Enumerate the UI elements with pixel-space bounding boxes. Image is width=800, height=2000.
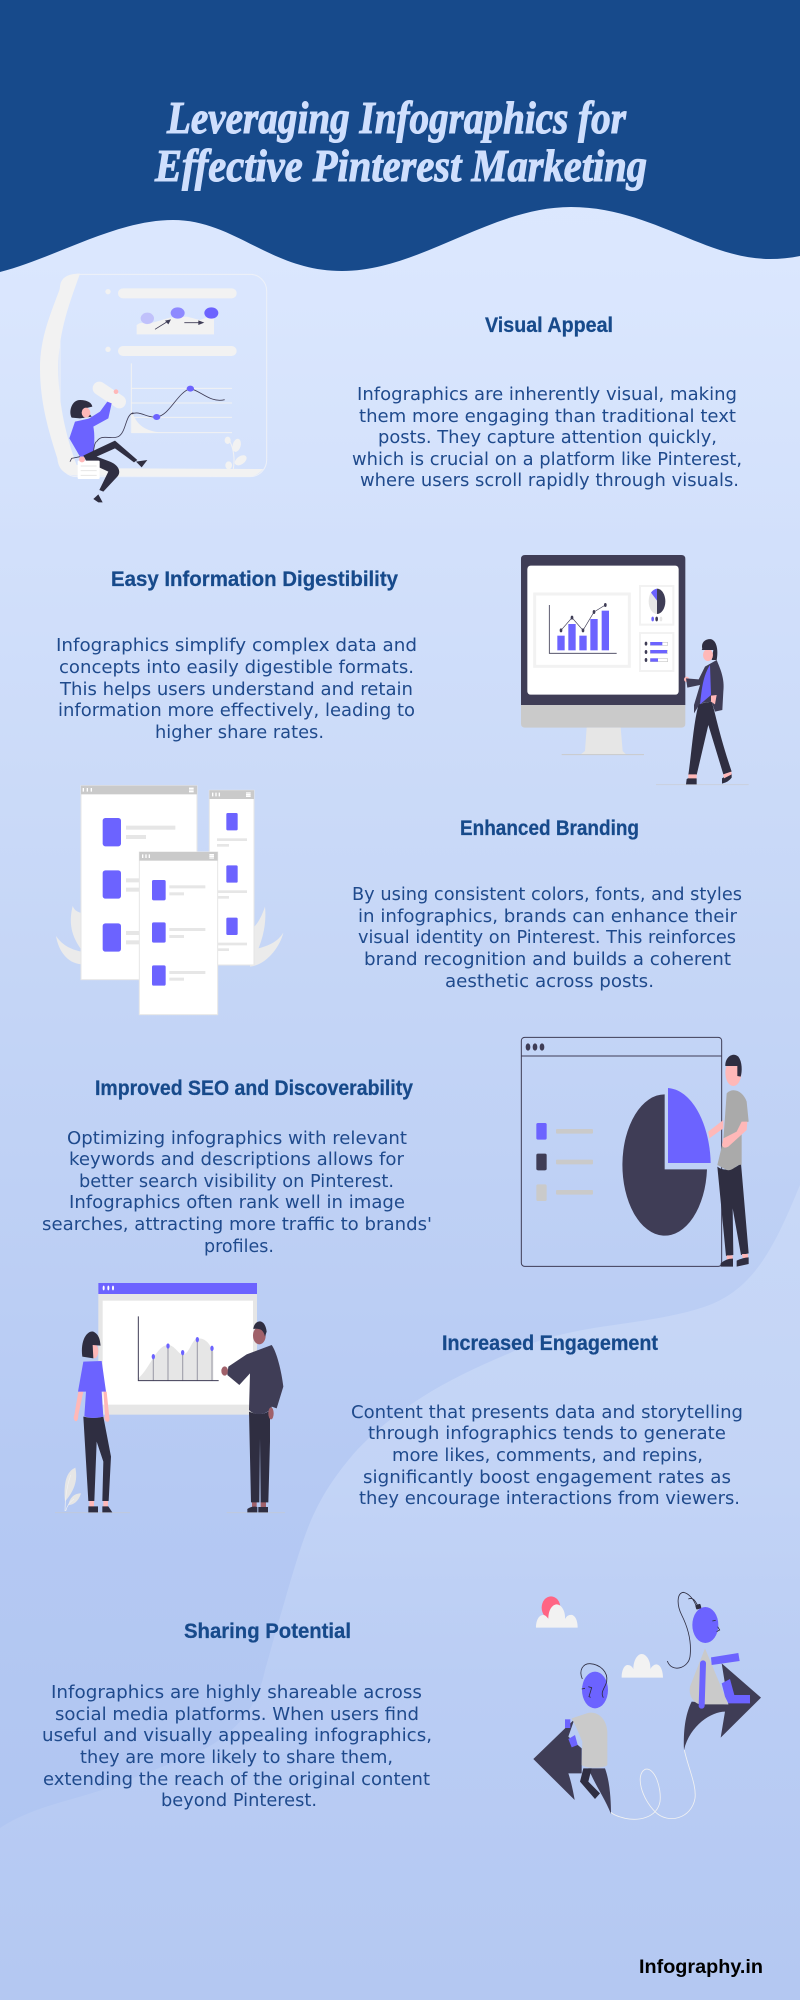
text block: visual appeal: where users scroll rapidly through visuals. [360, 471, 739, 491]
text block: improved seo: searches, attracting more traffic to brands' [42, 1215, 432, 1235]
text block: sharing potential: extending the reach of the original content [43, 1770, 430, 1790]
text block: increased engagement: they encourage interactions from viewers. [359, 1489, 740, 1509]
text block: sharing potential: beyond Pinterest. [161, 1791, 317, 1811]
text block: visual appeal: posts. They capture attention quickly, [378, 428, 717, 448]
text block: digestibility: higher share rates. [155, 723, 324, 743]
text block: increased engagement [351, 1403, 743, 1509]
panel: visual appeal [40, 274, 742, 502]
heading: visual appeal: Visual Appeal [485, 314, 613, 337]
text block: sharing potential: social media platforms. When users find [55, 1705, 419, 1725]
text block: enhanced branding: visual identity on Pinterest. This reinforces [358, 928, 736, 948]
text block: improved seo: Infographics often rank well in image [69, 1193, 405, 1213]
heading: sharing potential: Sharing Potential [184, 1620, 351, 1643]
panel: improved seo [42, 1037, 749, 1267]
text block: improved seo: better search visibility on Pinterest. [79, 1172, 394, 1192]
text block: enhanced branding: aesthetic across posts. [445, 972, 654, 992]
text block: digestibility: This helps users understand and retain [59, 680, 413, 700]
text block: enhanced branding: By using consistent colors, fonts, and styles [352, 885, 742, 905]
text block: visual appeal: which is crucial on a platform like Pinterest, [352, 450, 742, 470]
text block: improved seo [42, 1129, 432, 1257]
title: Leveraging Infographics for [166, 92, 627, 143]
heading: digestibility: Easy Information Digestibility [111, 568, 398, 591]
brand footer: Infography.in [639, 1957, 763, 1978]
text block: digestibility: concepts into easily digestible formats. [59, 658, 414, 678]
panel: enhanced branding [56, 786, 742, 1015]
text block: visual appeal [352, 385, 742, 491]
heading: increased engagement: Increased Engagement [442, 1332, 658, 1355]
illustration: stacked pages with leaves [56, 786, 283, 1015]
text block: digestibility: Infographics simplify complex data and [56, 636, 417, 656]
text block: digestibility: information more effectively, leading to [58, 701, 415, 721]
text block: enhanced branding [352, 885, 742, 992]
text block: sharing potential [42, 1683, 432, 1811]
text block: increased engagement: Content that presents data and storytelling [351, 1403, 743, 1423]
panel: increased engagement [55, 1283, 743, 1513]
text block: sharing potential: they are more likely to share them, [80, 1748, 393, 1768]
text block: increased engagement: more likes, comments, and repins, [392, 1446, 703, 1466]
illustration: two people with chart [55, 1283, 285, 1513]
text block: improved seo: Optimizing infographics with relevant [67, 1129, 407, 1149]
illustration: woman with dashboard [40, 274, 267, 502]
text block: enhanced branding: brand recognition and builds a coherent [364, 950, 731, 970]
title: Effective Pinterest Marketing [154, 140, 647, 191]
text block: improved seo: keywords and descriptions allows for [69, 1150, 405, 1170]
illustration: monitor with charts and woman [521, 555, 749, 785]
header wave [0, 0, 800, 272]
text block: sharing potential: useful and visually appealing infographics, [42, 1726, 432, 1746]
heading: improved seo: Improved SEO and Discoverability [95, 1077, 413, 1100]
text block: increased engagement: significantly boost engagement rates as [363, 1468, 731, 1488]
panel: sharing potential [42, 1592, 761, 1819]
illustration: browser window with pie chart and man [521, 1037, 749, 1267]
text block: visual appeal: them more engaging than traditional text [359, 407, 736, 427]
illustration: people riding arrows with clouds [533, 1592, 761, 1819]
text block: sharing potential: Infographics are highly shareable across [51, 1683, 422, 1703]
text block: increased engagement: through infographics tends to generate [368, 1424, 726, 1444]
text block: enhanced branding: in infographics, brands can enhance their [358, 907, 738, 927]
text block: visual appeal: Infographics are inherently visual, making [357, 385, 737, 405]
panel: easy information digestibility [56, 555, 749, 785]
title [154, 92, 647, 191]
heading: enhanced branding: Enhanced Branding [460, 817, 639, 840]
text block: digestibility [56, 636, 417, 743]
text block: improved seo: profiles. [204, 1237, 274, 1257]
